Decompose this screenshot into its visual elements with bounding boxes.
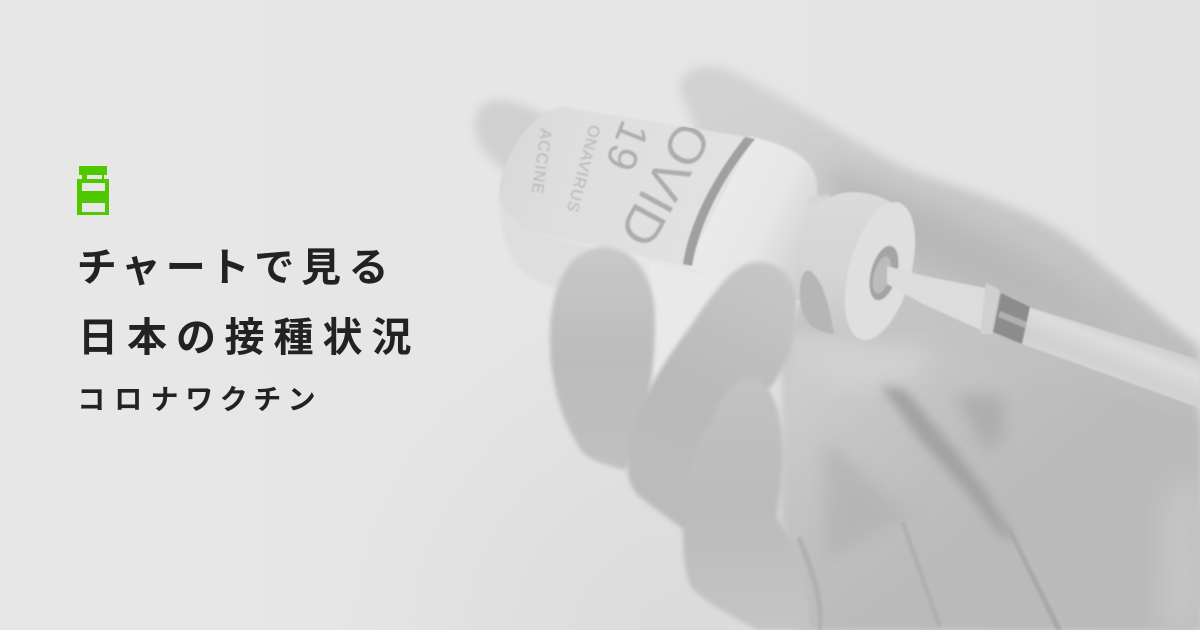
lower hand [779, 330, 1200, 630]
finger 1 [550, 247, 655, 470]
glove fold: secondary [825, 440, 920, 560]
dark band above needle [820, 160, 1140, 350]
cap hole [864, 243, 904, 303]
glove fold: blob [955, 395, 1005, 450]
vial neck [802, 195, 830, 280]
dark band [993, 293, 1030, 344]
light area below vial cap [810, 345, 940, 385]
finger 2 [627, 262, 797, 530]
label stripe [683, 137, 755, 266]
syringe [887, 266, 1200, 408]
needle hub [887, 266, 985, 332]
vial base [499, 195, 600, 290]
right edge light patch [1160, 470, 1200, 630]
glove fold: main diagonal [880, 385, 1015, 540]
cap face [832, 194, 928, 348]
back of hand and index finger [680, 66, 1200, 630]
vial text: ONAVIRUS [563, 123, 603, 215]
cap shadow [800, 271, 834, 334]
finger 3 [683, 377, 810, 630]
title line 1: チャートで見る [78, 246, 395, 290]
vial glass shoulder [686, 136, 818, 310]
vial label [499, 107, 753, 266]
background photo: gloved hand holding vial and syringe [474, 65, 1200, 630]
icon: green vial [77, 166, 109, 215]
hub flange [980, 283, 1000, 334]
vial text: ACCINE [528, 127, 554, 196]
title line 2: 日本の接種状況 [78, 316, 420, 360]
vial cap [800, 192, 928, 348]
subtitle: コロナワクチン [78, 384, 323, 415]
cap side [800, 192, 892, 340]
barrel [1022, 307, 1200, 408]
vial text: 19 [596, 115, 658, 179]
light gap between fingers [640, 262, 800, 420]
vial text [532, 120, 706, 244]
left finger behind vial [475, 100, 570, 200]
vial text: OVID [607, 112, 721, 256]
